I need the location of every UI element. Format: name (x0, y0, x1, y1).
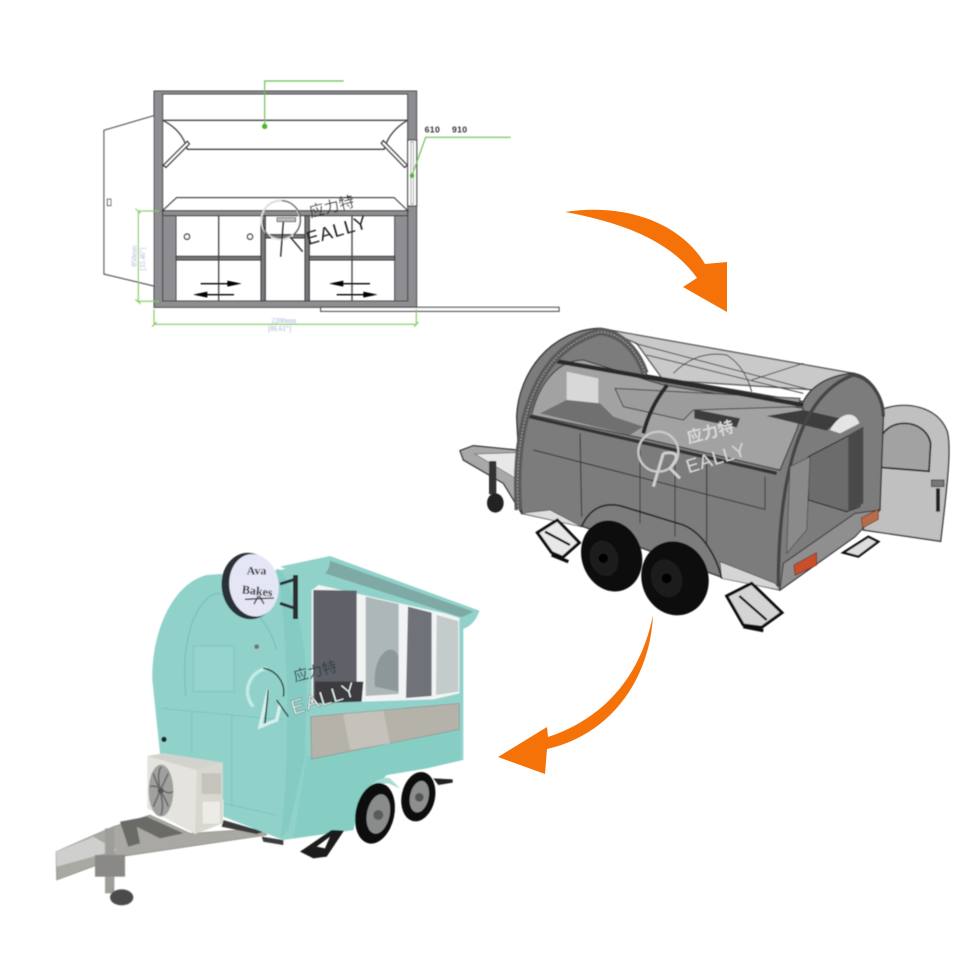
far roof, translucent (600, 328, 853, 390)
watermark: 应力特 (292, 657, 339, 686)
green leader lines (265, 81, 511, 175)
tow bar (460, 446, 530, 513)
round shop sign: Ava (247, 564, 266, 578)
arrow: 3D model to finished trailer (498, 615, 653, 774)
trailer walls (154, 91, 417, 307)
awning (280, 556, 479, 629)
rear compartment (808, 430, 860, 512)
stabilizer jack (300, 830, 344, 858)
windows (532, 360, 803, 470)
dark frame bars (550, 360, 803, 405)
rear wheels (397, 769, 453, 825)
side window (408, 140, 417, 206)
watermark: EALLY (304, 211, 370, 249)
cabinets (163, 216, 176, 301)
tail lights (794, 553, 817, 575)
arched end frame (518, 332, 645, 510)
open side door outline (104, 116, 154, 286)
watermark: EALLY (684, 440, 749, 478)
fold-down shelf (321, 307, 559, 311)
watermark (638, 417, 749, 487)
height dimension: 850mm (131, 245, 139, 267)
round shop sign: Bakes (241, 582, 274, 600)
watermark (248, 657, 360, 727)
wheel arch (582, 505, 722, 578)
round shop sign (217, 549, 298, 623)
stabilizer jacks (537, 520, 878, 631)
window frame (312, 583, 459, 703)
label: 610 910: 610 (425, 124, 440, 134)
panel: finished teal food trailer (56, 549, 479, 905)
panel: floor plan drawing: 910 (452, 124, 467, 134)
serving hatch (163, 120, 408, 149)
watermark: 应力特 (307, 193, 356, 221)
counter (163, 198, 408, 211)
watermark: EALLY (288, 678, 360, 720)
front wheels (350, 778, 400, 847)
watermark (261, 193, 370, 257)
width dimension: [86.61"] (268, 325, 291, 333)
bottom skirt strips (720, 562, 780, 590)
height dimension: [33.46"] (139, 247, 147, 271)
air conditioner unit (147, 753, 223, 834)
panel: floor plan drawing (104, 81, 559, 333)
lower panels (533, 433, 765, 543)
width dimension: 2200mm (271, 317, 297, 325)
width dimension (152, 309, 419, 333)
sliding door arrows (193, 281, 378, 298)
trailer body (152, 560, 463, 840)
watermark: 应力特 (685, 417, 736, 447)
wheels (572, 512, 718, 624)
trailer body (517, 328, 883, 590)
panel: 3D trailer model (460, 328, 949, 631)
arrow: drawing to 3D model (565, 210, 727, 312)
stainless steel counter panel (311, 703, 459, 759)
lower panel highlight (293, 727, 460, 838)
height dimension (131, 209, 159, 304)
drawbar (56, 815, 283, 905)
rear door (863, 405, 949, 541)
